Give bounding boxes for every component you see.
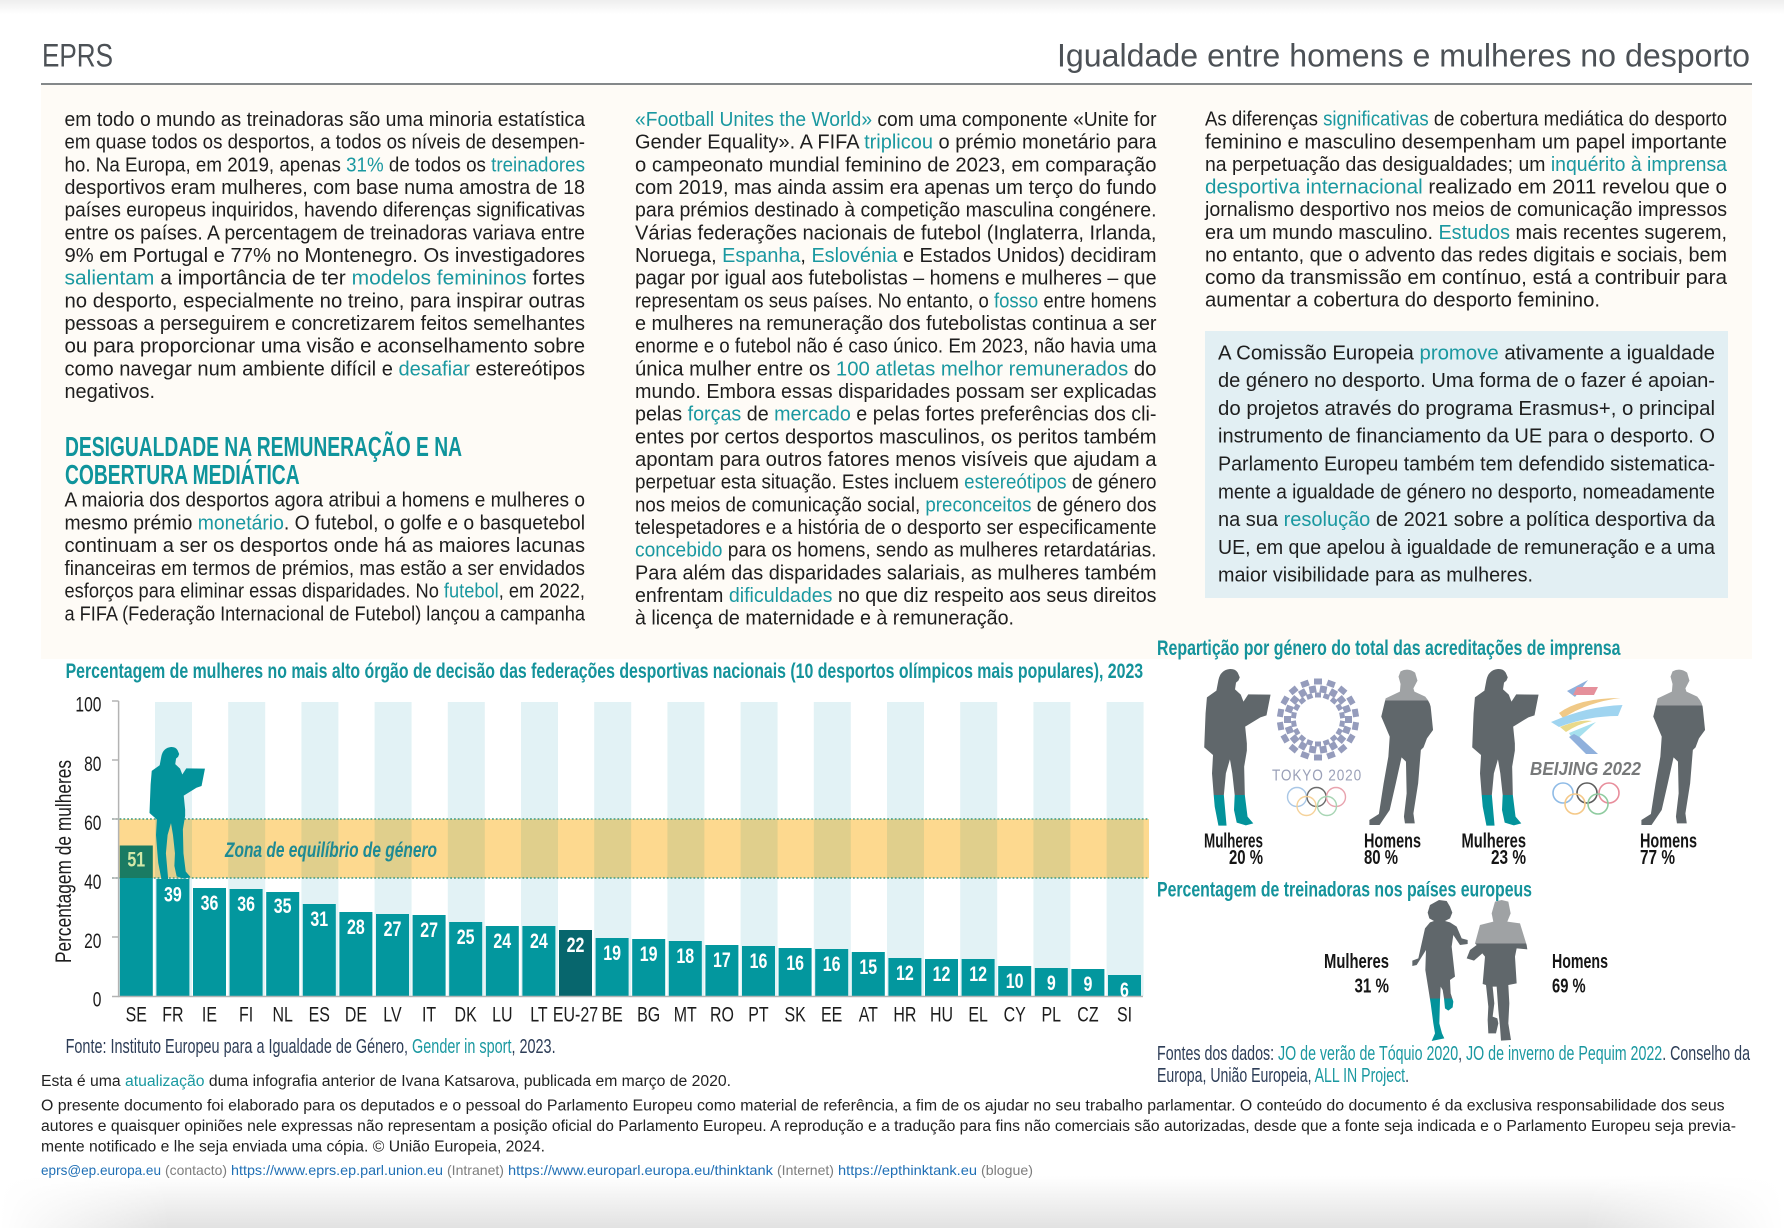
bar chart: women in national sports federations [51,692,1149,1026]
country labels: SE [126,1003,147,1026]
icon: man runner [1467,900,1527,1041]
text column 2: o campeonato mundial feminino de 2023, em comparação [635,154,1156,176]
country labels: RO [710,1003,734,1026]
value labels: 24 [530,929,548,953]
country labels: CZ [1077,1003,1099,1026]
text column 2: Para além das disparidades salariais, as mulheres também [635,562,1156,584]
country labels: PL [1042,1003,1061,1026]
footer: contact links: eprs@ep.europa.eu [41,1162,161,1178]
text column 2: nos meios de comunicação social, preconceitos de género dos [635,494,1156,516]
text column 1: first paragraph: em quase todos os desportos, a todos os níveis de desempen- [64,132,585,154]
country labels: LV [383,1003,402,1026]
callout box: European Commission: instrumento de financiamento da UE para o desporto. O [1218,426,1715,448]
country labels: AT [859,1003,878,1026]
text column 1: first paragraph: como navegar num ambiente difícil e desafiar estereótipos [64,358,585,380]
text column 2: pagar por igual aos futebolistas – homens e mulheres – que [635,268,1156,290]
country labels: FI [239,1003,253,1026]
y axis tick labels: 40 [84,870,101,894]
text column 2: Gender Equality». A FIFA triplicou o prémio monetário para [635,132,1157,154]
chart title: Percentagem de mulheres no mais alto órgão de decisão das federações desportivas nacionais (10 desportos olímpicos mais populares), 2023 [66,660,1143,683]
callout box: European Commission [1205,331,1728,598]
value labels: 16 [750,949,767,973]
value labels: 24 [493,929,512,953]
y axis tick labels: 100 [75,692,101,716]
footer: disclaimer: mente notificado e lhe seja enviada uma cópia. © União Europeia, 2024. [41,1139,545,1156]
footer: contact links: (blogue) [981,1162,1033,1178]
footer: contact links: (Intranet) [447,1162,504,1178]
text column 1: first paragraph: entre os países. A percentagem de treinadoras variava entre [64,222,585,244]
icon: man Beijing 77% [1641,670,1705,825]
y axis tick labels [75,692,101,1011]
text column 2 [635,109,1157,630]
callout box: European Commission: Parlamento Europeu também tem defendido sistematica- [1218,454,1715,476]
country labels: ES [309,1003,330,1026]
press labels: Tokyo women [1204,830,1263,869]
value labels: 9 [1047,971,1056,995]
y axis tick labels: 20 [84,929,101,953]
callout box: European Commission: mente a igualdade de género no desporto, nomeadamente [1218,481,1715,503]
text column 2: enfrentam dificuldades no que diz respeito aos seus direitos [635,585,1156,607]
footer: contact links: https://www.eprs.ep.parl.union.eu [231,1162,443,1178]
coaches labels: women: 31 % [1354,976,1389,998]
value labels: 18 [676,944,694,968]
icon: man Tokyo 80% [1369,670,1433,825]
gender balance zone band [112,819,1149,878]
text column 3: jornalismo desportivo nos meios de comunicação impressos [1204,199,1727,221]
country labels: EL [968,1003,988,1026]
value labels: 12 [896,961,914,985]
icon: woman Tokyo 20% [1204,669,1271,826]
press labels: Beijing men: 77 % [1640,847,1675,869]
country labels: IE [202,1003,217,1026]
text column 3: no entanto, que o advento das redes digitais e sociais, bem [1205,244,1727,266]
press labels: Beijing women: 23 % [1491,847,1526,869]
icon: woman with laptop standing on the bar [149,747,205,879]
value labels: 27 [420,918,438,942]
country labels: LT [530,1003,548,1026]
country labels: FR [162,1003,184,1026]
footer: contact links: https://www.europarl.europa.eu/thinktank [508,1162,774,1178]
value labels: 27 [384,917,401,941]
value labels: 15 [859,955,877,979]
country labels: BE [601,1003,623,1026]
text column 2: telespetadores e a história de o desporto ser especificamente [635,517,1156,539]
country labels: EU-27 [553,1003,598,1026]
value labels: 35 [274,894,292,918]
icon: woman runner [1412,900,1468,1041]
logo: Tokyo 2020: TOKYO 2020 [1272,768,1362,785]
country labels: LU [492,1003,512,1026]
value labels: 6 [1120,978,1129,1002]
country labels: HR [893,1003,916,1026]
press labels: Tokyo women: 20 % [1229,847,1263,869]
value labels: 36 [237,892,255,916]
value labels: 39 [164,883,182,906]
page title: Igualdade entre homens e mulheres no desporto [1057,38,1750,74]
value labels: 31 [310,907,328,931]
data sources [1157,1043,1751,1087]
text column 1: second paragraph: continuam a ser os desportos onde há as maiores lacunas [64,535,585,557]
section heading [65,431,462,490]
header label: EPRS: EPRS [42,38,113,74]
press labels: Tokyo men [1364,830,1421,869]
coaches labels: women [1324,951,1389,998]
chart source: Fonte: Instituto Europeu para a Igualdade de Género, Gender in sport, 2023. [66,1036,556,1058]
text column 1: first paragraph: países europeus inquiridos, havendo diferenças significativas [64,200,585,222]
value labels: 28 [347,915,365,939]
text column 1: second paragraph: financeiras em termos de prémios, mas estão a ser envidados [64,558,585,580]
y axis title: Percentagem de mulheres [51,760,76,963]
country labels: PT [748,1003,769,1026]
heading: press accreditations: Repartição por género do total das acreditações de imprensa [1157,637,1621,660]
footer: contact links: https://epthinktank.eu [838,1162,977,1178]
text column 2: e mulheres na remuneração dos futebolistas continua a ser [635,313,1157,335]
footer: disclaimer: autores e quaisquer opiniões nele expressas não representam a posição oficial do Parlamento Europeu. A reprodução e a tradução para fins não comerciais são autorizadas, desde que a fonte seja indicada e o Parlamento Europeu seja previa- [41,1118,1736,1135]
text column 2: única mulher entre os 100 atletas melhor remunerados do [635,358,1156,380]
text column 1: first paragraph: pessoas a perseguirem e concretizarem feitos semelhantes [64,313,585,335]
country labels [126,1003,1132,1026]
country labels: NL [272,1003,293,1026]
press labels: Beijing women: Mulheres [1462,830,1526,852]
value labels: 12 [933,962,950,986]
coaches labels: women: Mulheres [1324,951,1389,973]
footer: contact links: (Internet) [777,1162,834,1178]
text column 1: second paragraph [64,490,586,626]
text column 1: first paragraph: ou para proporcionar uma visão e aconselhamento sobre [64,336,585,358]
callout box: European Commission: na sua resolução de 2021 sobre a política desportiva da [1218,509,1716,531]
bars [120,846,1141,996]
text column 3: aumentar a cobertura do desporto feminino. [1205,290,1600,312]
press labels: Beijing women [1462,830,1526,869]
text column 2: Várias federações nacionais de futebol (Inglaterra, Irlanda, [635,222,1156,244]
logo: Tokyo 2020 [1272,678,1362,816]
footer: disclaimer [41,1098,1736,1156]
text column 2: representam os seus países. No entanto, o fosso entre homens [635,290,1156,312]
footer: update note: Esta é uma atualização duma infografia anterior de Ivana Katsarova, publicada em março de 2020. [41,1073,731,1090]
value labels: 22 [567,933,584,957]
text column 1: first paragraph: 9% em Portugal e 77% no Montenegro. Os investigadores [64,245,585,267]
text column 3: era um mundo masculino. Estudos mais recentes sugerem, [1205,222,1727,244]
footer: contact links: (contacto) [165,1162,227,1178]
value labels: 17 [713,948,731,972]
press labels: Tokyo women: Mulheres [1204,830,1263,852]
callout box: European Commission: A Comissão Europeia promove ativamente a igualdade [1218,342,1715,364]
value labels: 12 [969,962,987,986]
text column 2: Noruega, Espanha, Eslovénia e Estados Unidos) decidiram [635,245,1156,267]
country labels: DE [345,1003,367,1026]
text column 2: enorme e o futebol não é caso único. Em 2023, não havia uma [635,336,1157,358]
value labels [127,848,1129,1002]
text column 3 [1204,109,1728,312]
zone label: Zona de equilíbrio de género [224,839,437,862]
text column 3: As diferenças significativas de cobertura mediática do desporto [1205,109,1727,131]
text column 1: second paragraph: A maioria dos desportos agora atribui a homens e mulheres o [64,490,585,512]
logo: Beijing 2022: BEIJING 2022 [1530,759,1641,779]
value labels: 9 [1084,972,1092,996]
text column 3: na perpetuação das desigualdades; um inquérito à imprensa [1205,154,1728,176]
text column 3: feminino e masculino desempenham um papel importante [1205,131,1727,153]
text column 2: «Football Unites the World» com uma componente «Unite for [635,109,1157,131]
text column 1: first paragraph: no desporto, especialmente no treino, para inspirar outras [64,290,585,312]
text column 2: com 2019, mas ainda assim era apenas um terço do fundo [635,177,1156,199]
coaches labels: men: Homens [1552,951,1608,973]
text column 2: pelas forças de mercado e pelas fortes preferências dos cli- [635,404,1156,426]
data sources: Europa, União Europeia, ALL IN Project. [1157,1065,1409,1087]
y axis tick labels: 60 [84,811,101,835]
country labels: HU [930,1003,953,1026]
country labels: MT [674,1003,697,1026]
footer: disclaimer: O presente documento foi elaborado para os deputados e o pessoal do Parlamento Europeu como material de referência, a fim de os ajudar no seu trabalho parlamentar. O conteúdo do documento é da exclusiva responsabilidade dos seus [41,1098,1725,1115]
press labels: Beijing men [1640,830,1697,869]
press labels: Tokyo men: 80 % [1364,847,1398,869]
panel: cream text background [41,85,1752,659]
value labels: 51 [127,848,145,871]
country labels: IT [422,1003,436,1026]
text column 1: first paragraph: ho. Na Europa, em 2019, apenas 31% de todos os treinadores [64,154,585,176]
country labels: SK [784,1003,806,1026]
callout box: European Commission: de género no desporto. Uma forma de o fazer é apoian- [1218,370,1715,392]
country labels: CY [1004,1003,1026,1026]
text column 1: first paragraph: desportivos eram mulheres, com base numa amostra de 18 [64,177,585,199]
text column 1: second paragraph: mesmo prémio monetário. O futebol, o golfe e o basquetebol [64,512,585,534]
heading: female coaches: Percentagem de treinadoras nos países europeus [1157,879,1532,902]
country labels: EE [821,1003,842,1026]
y axis tick labels: 80 [84,752,101,776]
value labels: 36 [201,891,218,915]
header [41,38,1752,84]
country labels: BG [637,1003,660,1026]
text column 3: desportiva internacional realizado em 2011 revelou que o [1205,177,1727,199]
coaches labels: men: 69 % [1552,976,1586,998]
axes [112,701,1143,996]
text column 2: para prémios destinado à competição masculina congénere. [635,200,1156,222]
icon: woman Beijing 23% [1472,669,1539,826]
text column 3: como da transmissão em contínuo, está a contribuir para [1205,267,1728,289]
callout box: European Commission: maior visibilidade para as mulheres. [1218,565,1533,587]
text column 1: first paragraph: negativos. [64,381,155,403]
text column 1: second paragraph: a FIFA (Federação Internacional de Futebol) lançou a campanha [64,604,586,626]
press labels: Beijing men: Homens [1640,830,1697,852]
section heading: DESIGUALDADE NA REMUNERAÇÃO E NA [65,431,462,462]
country labels: DK [455,1003,477,1026]
country labels: SI [1117,1003,1132,1026]
value labels: 19 [640,942,658,966]
text column 2: concebido para os homens, sendo as mulheres retardatárias. [635,540,1156,562]
value labels: 16 [823,952,841,976]
text column 2: perpetuar esta situação. Estes incluem estereótipos de género [635,472,1156,494]
data sources: Fontes dos dados: JO de verão de Tóquio 2020, JO de inverno de Pequim 2022. Conselho da [1157,1043,1751,1065]
text column 1: first paragraph: salientam a importância de ter modelos femininos fortes [64,268,585,290]
footer: contact links [41,1162,1033,1178]
value labels: 10 [1006,969,1024,993]
press labels: Tokyo men: Homens [1364,830,1421,852]
text column 1: first paragraph [64,109,586,403]
y axis tick labels: 0 [93,987,101,1011]
text column 2: à licença de maternidade e à remuneração. [635,608,1014,630]
text column 2: entes por certos desportos masculinos, os peritos também [635,426,1156,448]
coaches labels: men [1552,951,1608,998]
section heading: COBERTURA MEDIÁTICA [65,459,300,490]
value labels: 19 [603,941,621,965]
value labels: 16 [786,951,804,975]
text column 1: first paragraph: em todo o mundo as treinadoras são uma minoria estatística [64,109,586,131]
callout box: European Commission: do projetos através do programa Erasmus+, o principal [1218,398,1715,420]
text column 1: second paragraph: esforços para eliminar essas disparidades. No futebol, em 2022, [64,581,585,603]
callout box: European Commission: UE, em que apelou à igualdade de remuneração e a uma [1218,537,1716,559]
value labels: 25 [457,925,475,949]
text column 2: mundo. Embora essas disparidades possam ser explicadas [635,381,1156,403]
text column 2: apontam para outros fatores menos visíveis que ajudam a [635,449,1157,471]
logo: Beijing 2022 [1530,680,1641,814]
